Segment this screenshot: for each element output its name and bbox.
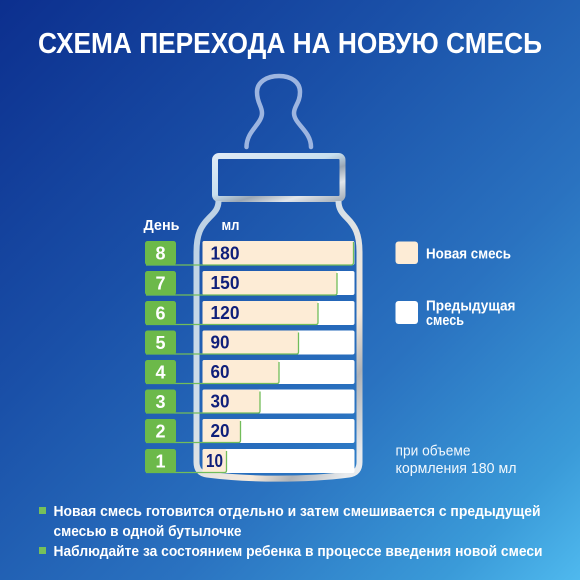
row: day 2, 20 ml: 20 — [210, 421, 230, 441]
row: day 4, 60 ml: 60 — [210, 362, 230, 382]
legend: previous formula: Предыдущая — [426, 298, 516, 314]
row: day 8, 180 ml: 180 — [210, 244, 240, 264]
note: feeding volume — [396, 444, 516, 477]
bottle body — [196, 201, 360, 479]
legend: previous formula — [396, 298, 516, 329]
note: feeding volume: при объеме — [396, 444, 470, 460]
bottle nipple — [246, 76, 311, 147]
note: first bullet: смесью в одной бутылочке — [54, 523, 242, 540]
icon: baby bottle — [196, 76, 360, 479]
row: day 4, 60 ml: 4 — [155, 362, 166, 382]
row: day 8, 180 ml: 8 — [155, 244, 166, 264]
row: day 3, 30 ml — [145, 390, 354, 414]
row: day 6, 120 ml — [145, 301, 354, 325]
note: first bullet — [39, 503, 540, 540]
row: day 7, 150 ml — [145, 271, 354, 295]
column heading: ml: мл — [222, 217, 240, 234]
row: day 5, 90 ml: 90 — [210, 332, 230, 352]
row: day 3, 30 ml: 3 — [155, 392, 166, 412]
row: day 7, 150 ml: 150 — [210, 273, 240, 293]
note: first bullet: Новая смесь готовится отдельно и затем смешивается с предыдущей — [54, 503, 540, 520]
row: day 6, 120 ml: 120 — [210, 303, 240, 323]
legend: new formula: Новая смесь — [426, 246, 511, 262]
row: day 4, 60 ml — [145, 360, 354, 384]
note: second bullet: Наблюдайте за состоянием ребенка в процессе введения новой смеси — [54, 543, 542, 560]
row: day 6, 120 ml: 6 — [155, 304, 166, 324]
row: day 2, 20 ml: 2 — [155, 422, 166, 442]
row: day 8, 180 ml — [145, 241, 354, 265]
row: day 2, 20 ml — [145, 419, 354, 443]
row: day 1, 10 ml: 10 — [206, 451, 223, 471]
legend: previous formula: смесь — [426, 312, 464, 329]
row: day 7, 150 ml: 7 — [155, 274, 166, 294]
legend: new formula — [396, 242, 511, 264]
row: day 3, 30 ml: 30 — [210, 392, 230, 412]
row: day 1, 10 ml — [145, 449, 354, 473]
row: day 5, 90 ml — [145, 330, 354, 354]
bottle cap — [215, 156, 342, 199]
row: day 1, 10 ml: 1 — [155, 452, 166, 472]
title: СХЕМА ПЕРЕХОДА НА НОВУЮ СМЕСЬ — [38, 28, 542, 60]
column heading: day: День — [144, 217, 180, 234]
note: feeding volume: кормления 180 мл — [396, 461, 516, 477]
row: day 5, 90 ml: 5 — [155, 333, 166, 353]
